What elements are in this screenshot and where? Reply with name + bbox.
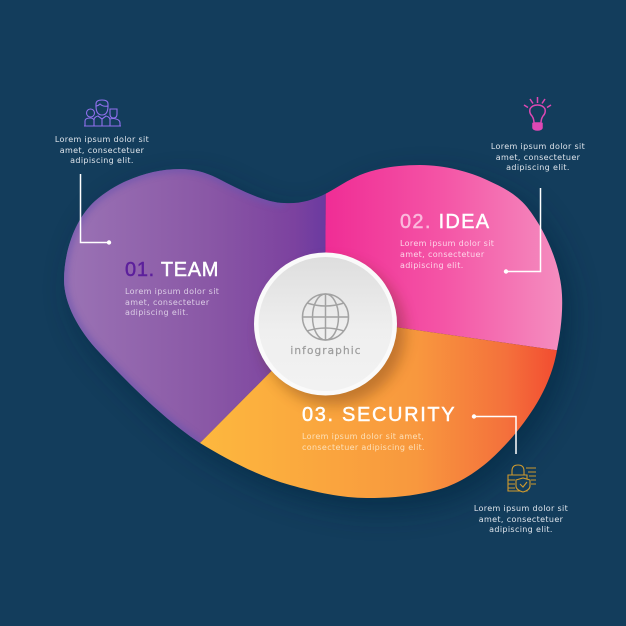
text block: idea callout: Lorem ipsum dolor sit [491, 142, 585, 151]
section: team text [125, 259, 219, 317]
text block: security: Lorem ipsum dolor sit amet, [302, 432, 424, 441]
segment: security [200, 327, 557, 498]
text block: idea callout: amet, consectetuer [496, 153, 581, 162]
text block: idea: Lorem ipsum dolor sit [400, 239, 494, 248]
text block: team callout: adipiscing elit. [70, 156, 134, 165]
text block: team: Lorem ipsum dolor sit [125, 287, 219, 296]
text block: security callout: amet, consectetuer [479, 515, 564, 524]
badge label: infographic [290, 345, 362, 357]
segment: idea [325, 165, 562, 350]
text block: idea callout: adipiscing elit. [506, 163, 570, 172]
connector: idea [504, 188, 540, 274]
text block: team callout: amet, consectetuer [60, 146, 145, 155]
text block: team: adipiscing elit. [125, 308, 189, 317]
heading: 03 security: 03. SECURITY [302, 404, 456, 426]
connector: security [472, 414, 516, 454]
icon: globe [302, 294, 348, 340]
section: security text [302, 404, 456, 452]
heading: 02 idea: 02. IDEA [400, 211, 490, 233]
icon: security lock [508, 465, 536, 492]
central circle shadow [261, 261, 405, 405]
connector: team [80, 174, 111, 245]
text block: security callout: adipiscing elit. [489, 525, 553, 534]
central badge [254, 252, 397, 396]
text block: team callout: Lorem ipsum dolor sit [55, 135, 149, 144]
text block: team: amet, consectetuer [125, 298, 210, 307]
segment: team [64, 169, 326, 443]
text block: security: consectetuer adipiscing elit. [302, 443, 425, 452]
heading: 01 team: 01. TEAM [125, 259, 219, 281]
text block: idea: amet, consectetuer [400, 250, 485, 259]
text block: security callout: Lorem ipsum dolor sit [474, 504, 568, 513]
section: idea text [400, 211, 494, 270]
heart shadow [73, 177, 571, 510]
text block: idea: adipiscing elit. [400, 261, 464, 270]
heart diagram [64, 165, 562, 498]
icon: light bulb [524, 97, 551, 130]
icon: team people [84, 100, 121, 126]
